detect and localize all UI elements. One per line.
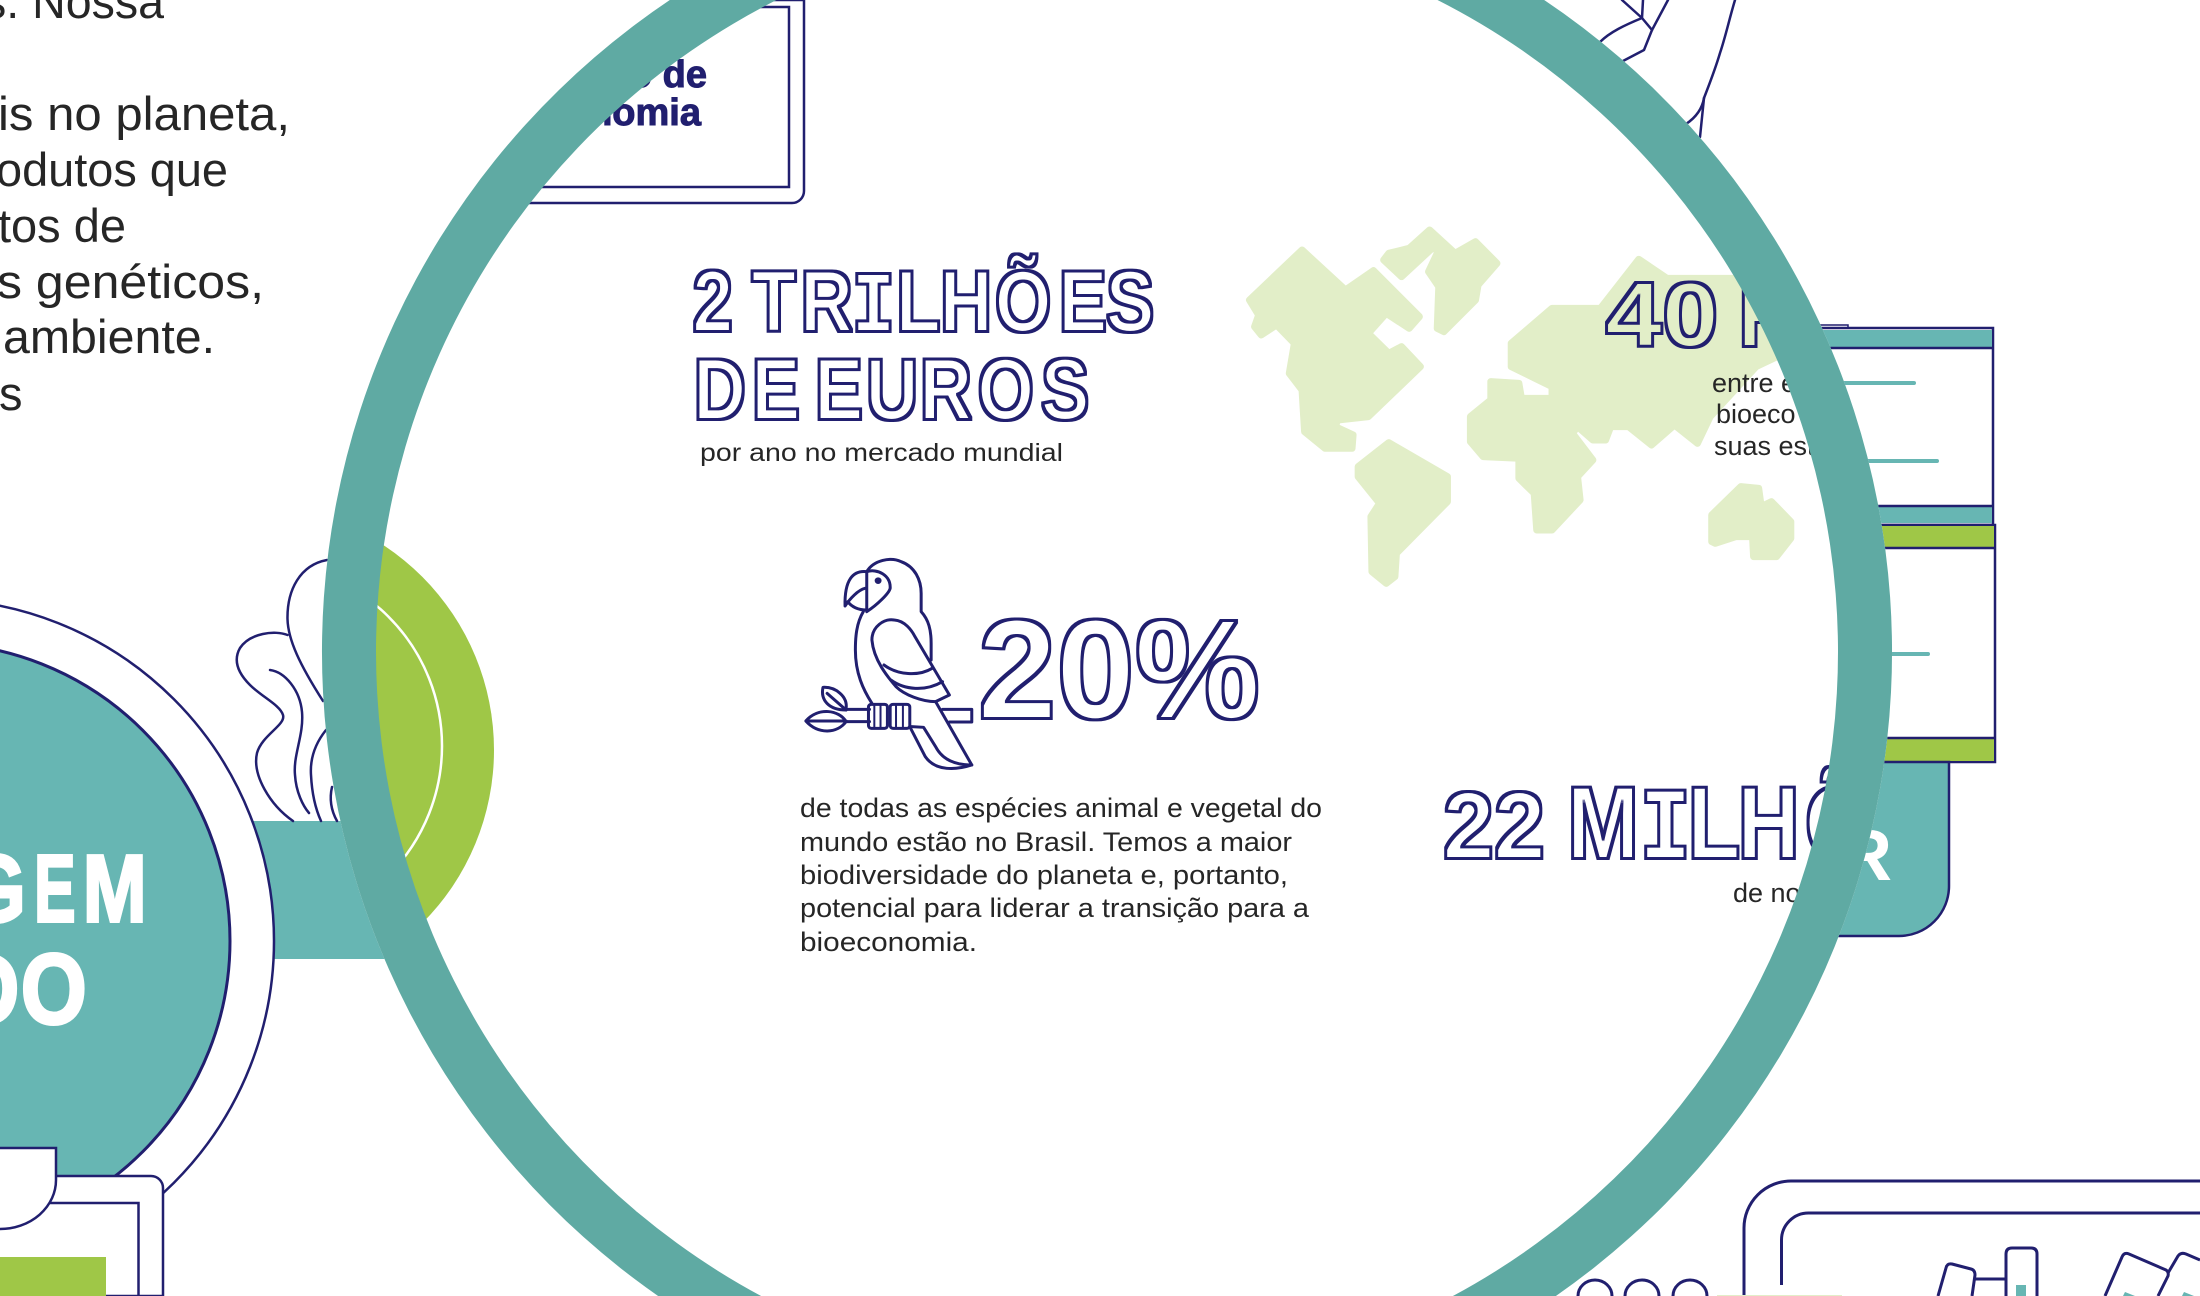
headline outline text: 40 <box>1606 265 1718 366</box>
panel: left circle badge <box>0 599 274 1283</box>
text block: left paragraph: tos de <box>0 199 126 252</box>
teal connector band <box>200 821 460 959</box>
text block: left paragraph: is no planeta, <box>0 87 290 140</box>
green circle <box>376 545 494 919</box>
lens interior <box>322 0 1892 1296</box>
headline outline text: PAÍSES <box>1738 257 2030 368</box>
caption: bioeco <box>1716 399 1796 429</box>
icon: parrot <box>806 559 972 769</box>
pale green bar <box>1717 1295 1842 1296</box>
panel: bottom-right device <box>1744 1181 2200 1296</box>
caption: entre e <box>1712 368 1796 398</box>
stat: 40 países <box>1605 280 1811 456</box>
headline outline text: 20% <box>978 590 1260 748</box>
caption <box>1713 374 1811 456</box>
text block: left paragraph: s genéticos, <box>0 255 264 308</box>
text block: left paragraph: odutos que <box>0 143 228 196</box>
panel: lower-left device <box>0 1148 163 1296</box>
tab <box>0 1148 56 1229</box>
headline outline text <box>1605 280 1760 349</box>
stat: 20% <box>800 590 1322 957</box>
headline outline text <box>693 253 1154 437</box>
magnifier ring <box>322 0 1892 1296</box>
chart icons <box>1938 1248 2200 1296</box>
headline outline text: LHÕES <box>1688 766 2002 880</box>
stat: 22 milhões <box>1444 765 1830 902</box>
description: potencial para liderar a transição para a <box>800 893 1310 923</box>
badge heading: E <box>34 836 76 943</box>
letter: R <box>1840 816 1892 896</box>
panel: top label card <box>529 0 806 204</box>
badge heading: M <box>83 835 147 942</box>
headline outline text: 2 <box>693 253 733 349</box>
badge heading <box>0 835 147 1045</box>
card text: bioeconomia <box>467 92 702 134</box>
icon: plant leaves <box>237 560 337 821</box>
caption: por ano no mercado mundial <box>700 439 1063 467</box>
headline outline text: LHÕES <box>896 253 1154 349</box>
headline outline text <box>1444 765 1830 860</box>
headline outline text: TR <box>752 253 853 349</box>
description: mundo estão no Brasil. Temos a maior <box>800 827 1292 857</box>
description: de todas as espécies animal e vegetal do <box>800 793 1322 823</box>
text block: left paragraph: ambiente. <box>3 310 215 363</box>
description: bioeconomia. <box>800 927 977 957</box>
panel: teal box with letter <box>1700 762 1949 936</box>
text block: left paragraph <box>0 0 290 420</box>
headline outline text: 22 <box>1443 773 1545 879</box>
caption: suas est <box>1714 431 1815 461</box>
icon: plant top right <box>1600 0 1735 137</box>
description: biodiversidade do planeta e, portanto, <box>800 860 1288 890</box>
caption: de novos empregos <box>1733 878 1970 908</box>
description <box>800 793 1322 957</box>
green block <box>0 1257 106 1296</box>
teal bars <box>2016 1285 2194 1296</box>
headline outline text: I <box>852 260 895 357</box>
world map <box>1249 230 1812 583</box>
panel: right shelf <box>1700 325 1995 762</box>
card text: Mercado de <box>496 54 707 96</box>
panel: lens content <box>4 0 2030 995</box>
headline outline text: I <box>1640 775 1691 889</box>
headline outline text: M <box>1567 766 1639 880</box>
stat: 2 trilhões de euros <box>693 253 1154 467</box>
headline outline text: DE <box>694 341 800 437</box>
card text <box>604 59 706 126</box>
decoration: three bottom circles <box>1578 1280 1707 1296</box>
headline outline text: EUROS <box>815 341 1089 437</box>
